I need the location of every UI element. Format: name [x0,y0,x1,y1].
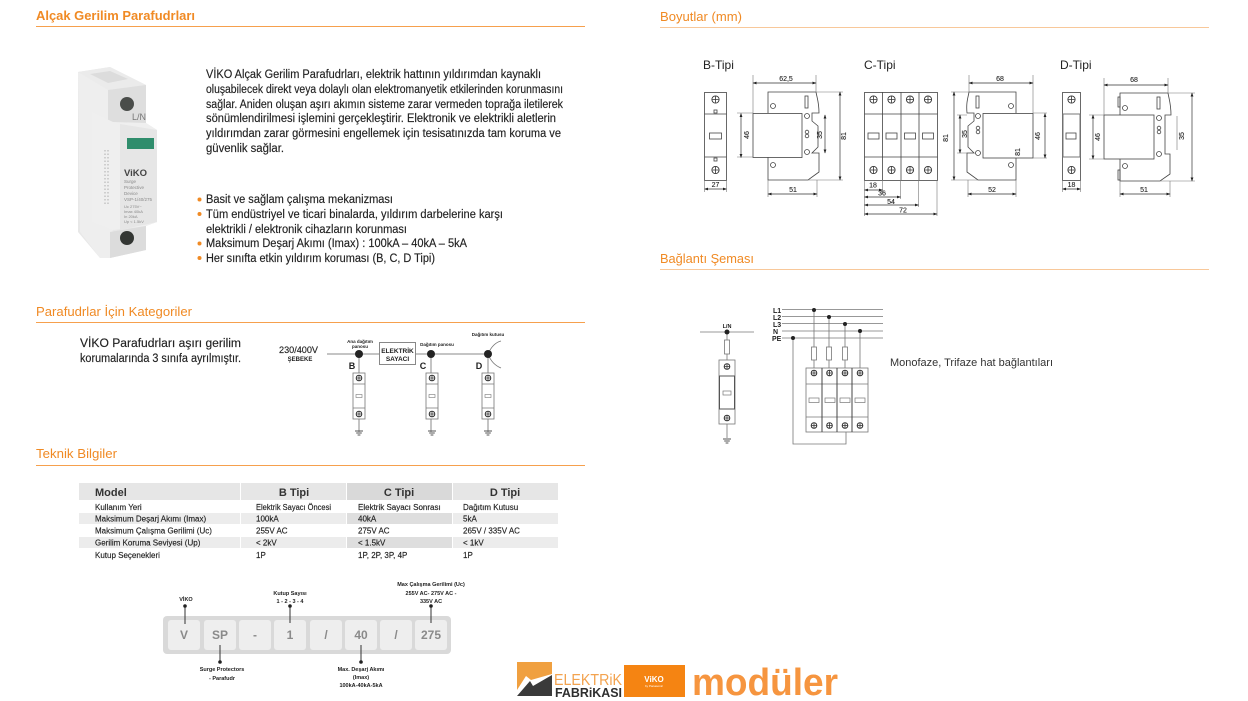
product photo: surge protective device: In 20kA [124,214,138,219]
bullet list: features: Maksimum Deşarj Akımı (Imax) : 100kA – 40kA – 5kA [206,238,467,250]
diagram: product code breakdown: (Imax) [353,675,369,681]
text block: product description: güvenlik sağlar. [206,143,284,155]
heading: Teknik Bilgiler: Teknik Bilgiler [36,446,118,461]
text block: product description: VİKO Alçak Gerilim Parafudrları, elektrik hattının yıldırımdan kaynaklı [206,68,541,81]
diagram: product code breakdown: / [324,628,328,642]
drawing: D-Tipi dimensions: 51 [1140,187,1148,194]
diagram: three phase connection: N [773,329,778,336]
text block: product description: sağlar. Aniden oluşan aşırı akımın sisteme zarar vermeden toprağa iletilerek [206,99,563,111]
heading: Bağlantı Şeması: Bağlantı Şeması [660,251,754,266]
table: technical data: B Tipi [279,487,309,499]
diagram: product code breakdown: VİKO [179,596,193,603]
diagram: product code breakdown: 1 [287,628,294,642]
diagram: product code breakdown: 275 [421,628,441,642]
drawing: D-Tipi dimensions: 35 [1179,132,1186,140]
drawing: C-Tipi dimensions: 18 [869,182,877,190]
table: technical data: Model [95,487,127,499]
table: technical data: 275V AC [358,526,390,536]
product photo: surge protective device: ViKO [124,168,147,179]
text block: categories intro: korumalarında 3 sınıfa ayrılmıştır. [80,353,241,365]
text: connection caption: Monofaze, Trifaze hat bağlantıları [890,357,1053,369]
diagram: product code breakdown: V [180,628,188,642]
diagram: single phase connection: L/N [723,324,731,330]
diagram: product code breakdown: Max Çalışma Gerilimi (Uc) [397,582,465,588]
diagram: product code breakdown: SP [212,628,228,642]
bullet list: features: elektrikli / elektronik cihazların korunması [206,224,407,236]
logos: Elektrik Fabrikası, Viko, modüler: FABRiKASI [555,686,622,700]
logos: Elektrik Fabrikası, Viko, modüler: ELEKTRiK [554,672,623,689]
diagram: grid protection classes: B [349,361,356,371]
drawing: C-Tipi dimensions: 81 [943,134,950,142]
product photo: surge protective device [78,67,157,258]
table: technical data: Elektrik Sayacı Sonrası [358,503,441,512]
table: technical data: 1P, 2P, 3P, 4P [358,551,407,560]
product photo: surge protective device: Device [124,191,138,196]
diagram: three phase connection: PE [772,336,782,343]
heading: Alçak Gerilim Parafudrları: Alçak Gerilim Parafudrları [36,8,195,23]
table: technical data: Kullanım Yeri [95,503,142,512]
diagram: product code breakdown: 1 - 2 - 3 - 4 [277,599,304,605]
table: technical data: 5kA [463,514,477,524]
diagram: product code breakdown [163,582,465,689]
bullet list: features: Her sınıfta etkin yıldırım koruması (B, C, D Tipi) [206,253,435,265]
diagram: grid protection classes: C [420,361,427,371]
drawing: C-Tipi dimensions: 72 [899,208,907,214]
drawing: B-Tipi dimensions: 51 [789,187,797,194]
drawing: C-Tipi dimensions: 35 [962,130,969,138]
diagram: grid protection classes: Dağıtım kutusu [472,332,504,337]
logos: Elektrik Fabrikası, Viko, modüler [517,662,838,701]
table: technical data: D Tipi [490,487,520,499]
text block: categories intro [80,337,241,365]
diagram: grid protection classes: Dağıtım panosu [420,342,454,347]
bullet list: features: Tüm endüstriyel ve ticari binalarda, yıldırım darbelerine karşı [206,209,503,221]
diagram: product code breakdown: - Parafudr [209,676,236,682]
drawing: C-Tipi dimensions: 52 [988,187,996,194]
product photo: surge protective device: Surge [124,179,137,184]
diagram: grid protection classes: Ana dağıtım [347,339,373,344]
drawing: B-Tipi dimensions: 62,5 [779,76,793,83]
drawing: C-Tipi dimensions: C-Tipi [864,58,896,72]
diagram: three phase connection: L3 [773,322,781,329]
product photo: surge protective device: Uc 275V~ [124,204,142,209]
diagram: grid protection classes: ŞEBEKE [288,357,312,363]
table: technical data: 40kA [358,514,377,524]
drawing: C-Tipi dimensions: 36 [878,190,886,198]
drawing: C-Tipi dimensions [864,58,1047,216]
table: technical data [79,483,558,560]
table: technical data: Kutup Seçenekleri [95,551,160,560]
table: technical data: < 2kV [256,538,277,548]
table: technical data: < 1kV [463,538,484,548]
table: technical data: 255V AC [256,526,288,536]
heading: Boyutlar (mm): Boyutlar (mm) [660,9,742,24]
diagram: grid protection classes: panosu [352,344,368,349]
drawing: B-Tipi dimensions: 46 [744,131,751,139]
diagram: product code breakdown: / [394,628,398,642]
text block: product description: oluşabilecek direkt veya dolaylı olan elektromanyetik etkilerinden korunmasını [206,84,563,96]
diagram: product code breakdown: Surge Protectors [200,667,244,673]
logos: Elektrik Fabrikası, Viko, modüler: ViKO [644,675,664,684]
diagram: product code breakdown: 40 [354,628,368,642]
drawing: D-Tipi dimensions: 68 [1130,77,1138,84]
diagram: single phase connection [700,324,754,443]
bullet list: features [198,194,503,265]
table: technical data: Elektrik Sayacı Öncesi [256,503,331,512]
table: technical data: Maksimum Deşarj Akımı (Imax) [95,514,206,524]
drawing: C-Tipi dimensions: 68 [996,76,1004,83]
drawing: B-Tipi dimensions: 81 [841,132,848,140]
drawing: D-Tipi dimensions: D-Tipi [1060,58,1092,72]
drawing: B-Tipi dimensions [703,58,848,197]
product photo: surge protective device: Imax 40kA [124,209,143,214]
product photo: surge protective device: L/N [132,112,146,122]
drawing: B-Tipi dimensions: B-Tipi [703,58,734,72]
diagram: grid protection classes: D [476,361,483,371]
drawing: D-Tipi dimensions [1060,58,1195,197]
table: technical data: 1P [256,551,266,560]
logos: Elektrik Fabrikası, Viko, modüler: by Panasonic [645,684,664,688]
diagram: product code breakdown: 255V AC- 275V AC - [406,591,457,597]
table: technical data: 1P [463,551,473,560]
diagram: three phase connection: L2 [773,315,781,322]
drawing: C-Tipi dimensions: 46 [1035,132,1042,140]
diagram: product code breakdown: Max. Deşarj Akımı [338,667,385,673]
table: technical data: Dağıtım Kutusu [463,503,518,512]
drawing: B-Tipi dimensions: 27 [712,182,719,189]
drawing: C-Tipi dimensions: 81 [1015,148,1022,156]
table: technical data: C Tipi [384,487,414,499]
text block: product description: yıldırımdan zarar görmesini engellemek için tesisatınızda tam koruma ve [206,128,561,140]
bullet list: features: Basit ve sağlam çalışma mekanizması [206,194,393,206]
diagram: grid protection classes: 230/400V [279,345,319,356]
product photo: surge protective device: VSP-1/40/275 [124,197,153,202]
diagram: grid protection classes: ELEKTRİK [381,347,414,355]
table: technical data: < 1.5kV [358,538,386,548]
diagram: product code breakdown: 335V AC [420,599,442,605]
diagram: grid protection classes: SAYACI [386,356,409,363]
diagram: three phase connection: L1 [773,308,781,315]
product photo: surge protective device: Up < 1.5kV [124,219,144,224]
table: technical data: Maksimum Çalışma Gerilimi (Uc) [95,526,212,536]
table: technical data: 100kA [256,514,279,524]
drawing: C-Tipi dimensions: 54 [887,199,895,206]
heading: Parafudrlar İçin Kategoriler: Parafudrlar İçin Kategoriler [36,304,193,319]
diagram: grid protection classes [279,332,504,435]
drawing: D-Tipi dimensions: 18 [1068,182,1075,189]
drawing: B-Tipi dimensions: 35 [817,131,824,139]
diagram: product code breakdown: Kutup Sayısı [273,591,307,597]
product photo: surge protective device: Protective [124,185,145,190]
table: technical data: 265V / 335V AC [463,526,520,536]
text block: product description [206,68,563,155]
diagram: three phase connection [772,308,883,444]
text block: product description: sönümlendirilmesi işlemini gerçekleştirir. Elektronik ve elektrikli aletlerin [206,113,556,125]
diagram: product code breakdown: 100kA-40kA-5kA [339,683,383,689]
text block: categories intro: VİKO Parafudrları aşırı gerilim [80,337,241,350]
diagram: product code breakdown: - [253,628,257,642]
table: technical data: Gerilim Koruma Seviyesi (Up) [95,538,201,548]
drawing: D-Tipi dimensions: 46 [1095,133,1102,141]
